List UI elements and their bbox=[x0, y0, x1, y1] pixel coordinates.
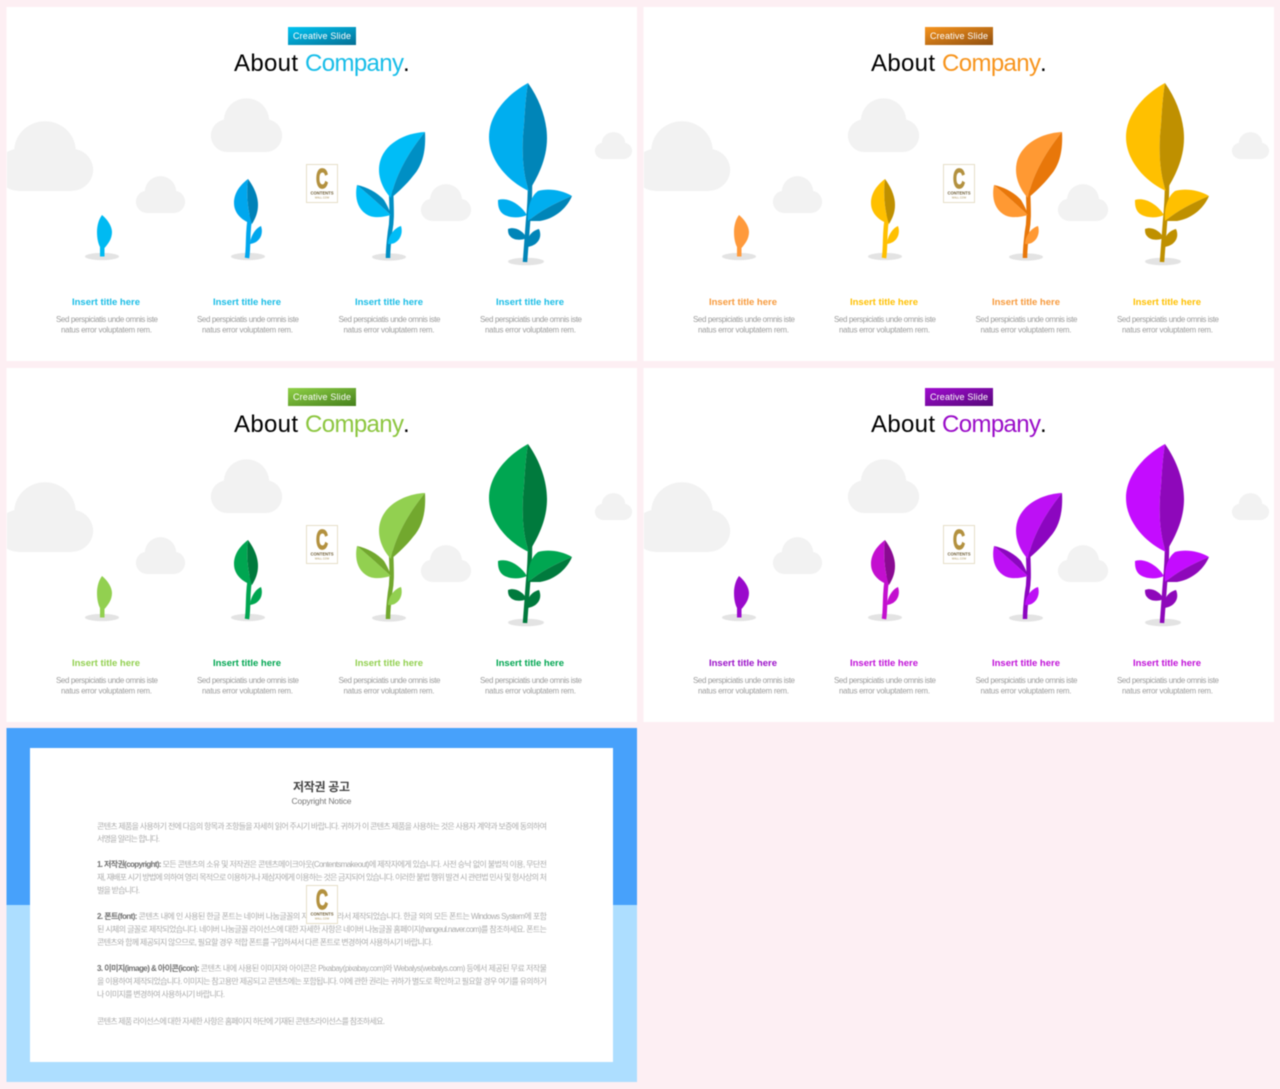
title: . bbox=[1040, 411, 1047, 438]
plant 2 bbox=[868, 179, 902, 260]
title: Company bbox=[305, 50, 404, 77]
notice text bbox=[97, 821, 548, 1026]
captions: natus error voluptatem rem. bbox=[980, 686, 1072, 696]
captions: natus error voluptatem rem. bbox=[839, 326, 930, 334]
title: About bbox=[234, 411, 298, 438]
plant 1 bbox=[722, 215, 756, 260]
badge bbox=[925, 27, 993, 45]
captions: natus error voluptatem rem. bbox=[485, 326, 576, 334]
plant 4 bbox=[1126, 444, 1209, 626]
captions bbox=[693, 658, 1220, 696]
badge: Creative Slide bbox=[293, 392, 351, 402]
logo bbox=[306, 524, 338, 564]
captions: Insert title here bbox=[213, 658, 281, 669]
plant 4 bbox=[489, 444, 572, 626]
captions: Sed perspiciatis unde omnis iste bbox=[56, 315, 159, 324]
panel: copyright notice bbox=[6, 728, 637, 1082]
plant 4 bbox=[489, 83, 572, 265]
logo bbox=[944, 524, 974, 564]
panel: purple slide bbox=[634, 368, 1274, 722]
heading: 저작권 공고 bbox=[293, 779, 350, 794]
captions bbox=[56, 297, 583, 334]
captions: natus error voluptatem rem. bbox=[485, 686, 576, 696]
captions: Insert title here bbox=[355, 297, 423, 308]
plant 3 bbox=[993, 132, 1062, 261]
captions: Sed perspiciatis unde omnis iste bbox=[976, 676, 1078, 685]
captions: Insert title here bbox=[355, 658, 423, 669]
captions: natus error voluptatem rem. bbox=[61, 686, 152, 696]
title bbox=[234, 50, 410, 77]
captions: natus error voluptatem rem. bbox=[980, 326, 1072, 334]
captions: Insert title here bbox=[213, 297, 281, 308]
clouds bbox=[0, 98, 632, 221]
notice text: 재, 재배포 시기 방법에 의하여 영리 목적으로 이용하거나 제삼자에게 이용하는 것은 금지되어 있습니다. 이러한 불법 행위 발견 시 관련법 민사 및 형사상의 처 bbox=[97, 872, 547, 882]
captions: Sed perspiciatis unde omnis iste bbox=[693, 676, 796, 685]
title: Company bbox=[942, 411, 1041, 438]
captions: Sed perspiciatis unde omnis iste bbox=[834, 315, 937, 324]
badge: Creative Slide bbox=[930, 31, 988, 41]
plant 3 bbox=[356, 132, 425, 261]
plant 2 bbox=[868, 540, 902, 621]
captions: Sed perspiciatis unde omnis iste bbox=[976, 315, 1078, 324]
title: . bbox=[403, 50, 410, 77]
plant 2 bbox=[231, 540, 265, 621]
plant 4 bbox=[1126, 83, 1209, 265]
plant 1 bbox=[85, 576, 119, 621]
notice text: 나 이미지를 변경하여 사용하시기 바랍니다. bbox=[97, 989, 225, 999]
captions: Sed perspiciatis unde omnis iste bbox=[1117, 676, 1220, 685]
badge: Creative Slide bbox=[930, 392, 988, 402]
captions: natus error voluptatem rem. bbox=[1122, 326, 1213, 334]
captions: Sed perspiciatis unde omnis iste bbox=[693, 315, 796, 324]
notice text: 2. 폰트(font): 콘텐츠 내에 인 사용된 한글 폰트는 네이버 나눔글꼴의 저작권을 따라서 제작되었습니다. 한글 외의 모든 폰트는 Windows System에 포함 bbox=[97, 911, 548, 921]
plant 1 bbox=[722, 576, 756, 621]
captions: natus error voluptatem rem. bbox=[698, 686, 789, 696]
captions: Insert title here bbox=[1133, 658, 1201, 669]
captions: Insert title here bbox=[72, 297, 140, 308]
notice text: 콘텐츠 제품 라이선스에 대한 자세한 사항은 홈페이지 하단에 기재된 콘텐츠라이선스를 참조하세요. bbox=[97, 1016, 385, 1026]
captions: Insert title here bbox=[850, 658, 918, 669]
notice text: 콘텐츠와 함께 제공되지 않으므로, 필요할 경우 적합 폰트를 구입하셔서 다른 폰트로 변경하여 사용하시기 바랍니다. bbox=[97, 937, 433, 947]
plant 3 bbox=[356, 493, 425, 622]
badge: Creative Slide bbox=[293, 31, 351, 41]
title bbox=[234, 411, 410, 438]
captions: Sed perspiciatis unde omnis iste bbox=[338, 315, 441, 324]
badge bbox=[288, 27, 356, 45]
notice text: 콘텐츠 제품을 사용하기 전에 다음의 항목과 조항들을 자세히 읽어 주시기 바랍니다. 귀하가 이 콘텐츠 제품을 사용하는 것은 사용자 계약과 보증에 동의하여 bbox=[97, 821, 547, 831]
subheading: Copyright Notice bbox=[292, 796, 352, 806]
captions: Insert title here bbox=[496, 658, 564, 669]
captions: Sed perspiciatis unde omnis iste bbox=[197, 676, 300, 685]
captions: Insert title here bbox=[1133, 297, 1201, 308]
captions: natus error voluptatem rem. bbox=[1122, 686, 1213, 696]
title: About bbox=[871, 411, 935, 438]
badge bbox=[288, 388, 356, 406]
title: Company bbox=[942, 50, 1041, 77]
captions: Sed perspiciatis unde omnis iste bbox=[338, 676, 441, 685]
notice text: 벌을 받습니다. bbox=[97, 885, 140, 895]
panel: orange slide bbox=[634, 7, 1274, 361]
notice text: 된 시체의 글꼴로 제작되었습니다. 네이버 나눔글꼴 라이선스에 대한 자세한 사항은 네이버 나눔글꼴 홈페이지(hangeul.naver.com)를 참조하세요. 폰트는 bbox=[97, 924, 547, 934]
captions: natus error voluptatem rem. bbox=[61, 326, 152, 334]
captions: Insert title here bbox=[709, 297, 777, 308]
captions: natus error voluptatem rem. bbox=[202, 686, 293, 696]
plant 1 bbox=[85, 215, 119, 260]
captions: natus error voluptatem rem. bbox=[839, 686, 930, 696]
captions: Sed perspiciatis unde omnis iste bbox=[1117, 315, 1220, 324]
title: . bbox=[403, 411, 410, 438]
title: About bbox=[871, 50, 935, 77]
panel: blue slide bbox=[0, 7, 637, 361]
notice text: 3. 이미지(image) & 아이콘(icon): 콘텐츠 내에 사용된 이미지와 아이콘은 Pixabay(pixabay.com)와 Webalys(webalys.com) 등에서 제공된 무료 저작물 bbox=[97, 963, 547, 973]
title: Company bbox=[305, 411, 404, 438]
clouds bbox=[634, 98, 1269, 221]
captions: natus error voluptatem rem. bbox=[698, 326, 789, 334]
captions: Insert title here bbox=[850, 297, 918, 308]
captions: natus error voluptatem rem. bbox=[344, 686, 434, 696]
captions: Sed perspiciatis unde omnis iste bbox=[197, 315, 300, 324]
clouds bbox=[0, 459, 632, 582]
title bbox=[871, 50, 1047, 77]
badge bbox=[925, 388, 993, 406]
notice text: 서명을 알리는 합니다. bbox=[97, 834, 160, 844]
captions bbox=[693, 297, 1220, 334]
logo bbox=[306, 884, 338, 924]
notice text: 을 이용하여 제작되었습니다. 이미지는 참고용만 제공되고 콘텐츠에는 포함됩니다. 이에 관한 권리는 귀하가 별도로 확인하고 필요할 경우 여기를 유의하거 bbox=[97, 976, 547, 986]
title: About bbox=[234, 50, 298, 77]
plant 3 bbox=[993, 493, 1062, 622]
clouds bbox=[634, 459, 1269, 582]
panel: green slide bbox=[0, 368, 637, 722]
captions bbox=[56, 658, 583, 696]
logo bbox=[306, 163, 338, 202]
captions: Sed perspiciatis unde omnis iste bbox=[56, 676, 159, 685]
captions: Sed perspiciatis unde omnis iste bbox=[480, 676, 583, 685]
captions: Insert title here bbox=[992, 658, 1060, 669]
captions: Sed perspiciatis unde omnis iste bbox=[480, 315, 583, 324]
captions: natus error voluptatem rem. bbox=[344, 326, 434, 334]
captions: Sed perspiciatis unde omnis iste bbox=[834, 676, 937, 685]
captions: Insert title here bbox=[72, 658, 140, 669]
logo bbox=[944, 163, 974, 202]
captions: Insert title here bbox=[496, 297, 564, 308]
notice text: 1. 저작권(copyright): 모든 콘텐츠의 소유 및 저작권은 콘텐츠메이크아웃(Contentsmakeout)에 제작자에게 있습니다. 사전 승낙 없이 불법적 이용, 무단전 bbox=[97, 859, 547, 869]
plant 2 bbox=[231, 179, 265, 260]
captions: Insert title here bbox=[992, 297, 1060, 308]
title: . bbox=[1040, 50, 1047, 77]
captions: Insert title here bbox=[709, 658, 777, 669]
captions: natus error voluptatem rem. bbox=[202, 326, 293, 334]
title bbox=[871, 411, 1047, 438]
